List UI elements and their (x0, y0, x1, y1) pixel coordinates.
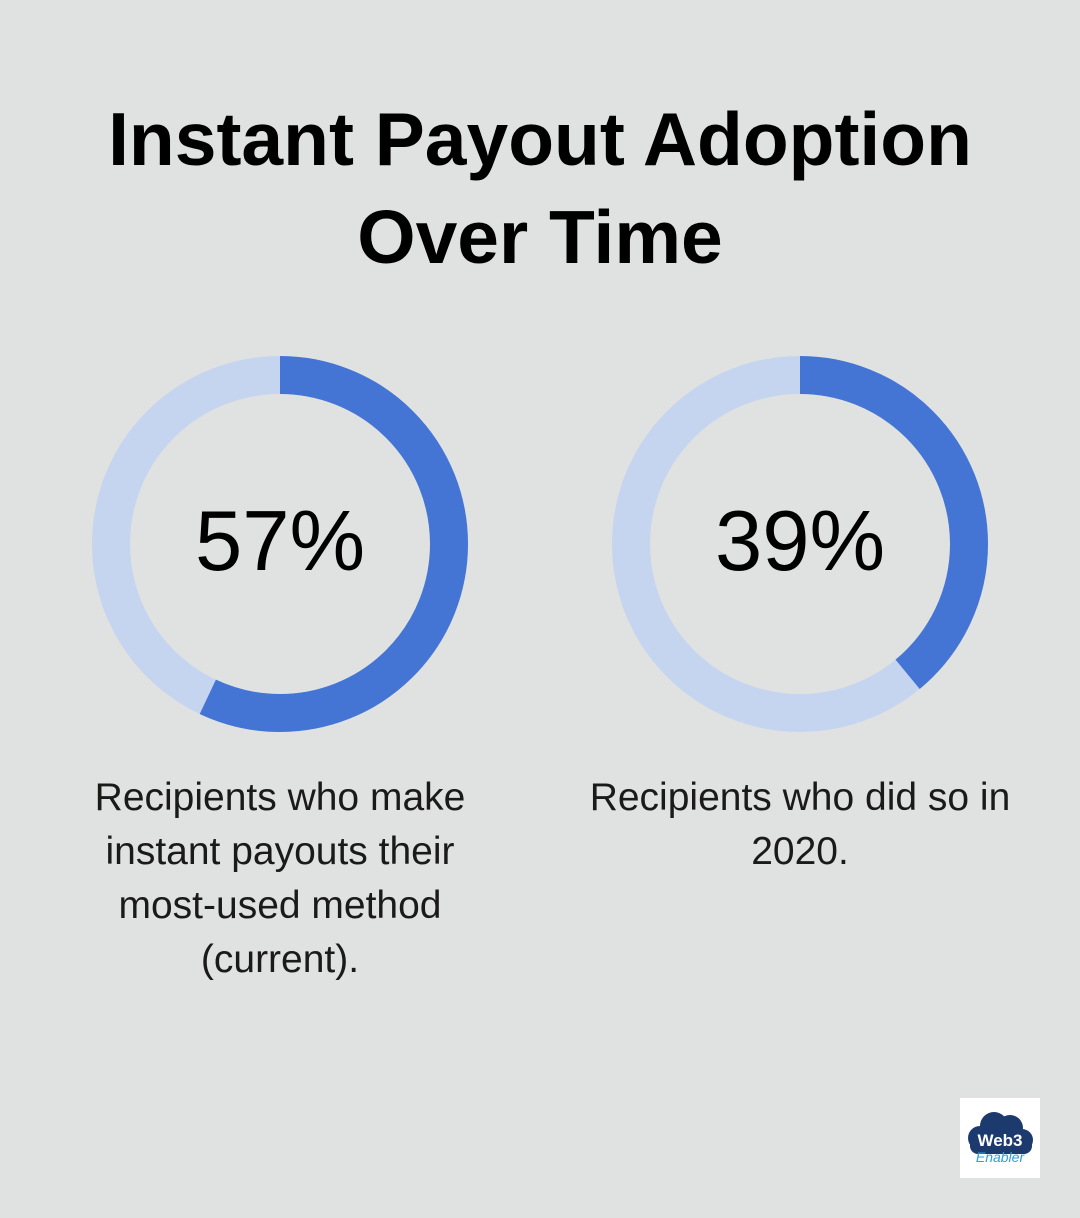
donut: 39%: 39% (715, 494, 885, 589)
donut: 39% (612, 356, 988, 732)
logo (960, 1098, 1040, 1178)
caption: current: Recipients who make instant payouts their most-used method (current). (95, 776, 465, 981)
title: Instant Payout Adoption (108, 97, 972, 181)
donut: 57%: 57% (195, 494, 365, 589)
logo: Web3 (977, 1131, 1023, 1150)
title: Over Time (357, 195, 723, 279)
logo: Enabler (976, 1149, 1025, 1165)
title (108, 97, 972, 279)
donut: 57% (92, 356, 468, 732)
caption: 2020: Recipients who did so in 2020. (590, 776, 1010, 873)
